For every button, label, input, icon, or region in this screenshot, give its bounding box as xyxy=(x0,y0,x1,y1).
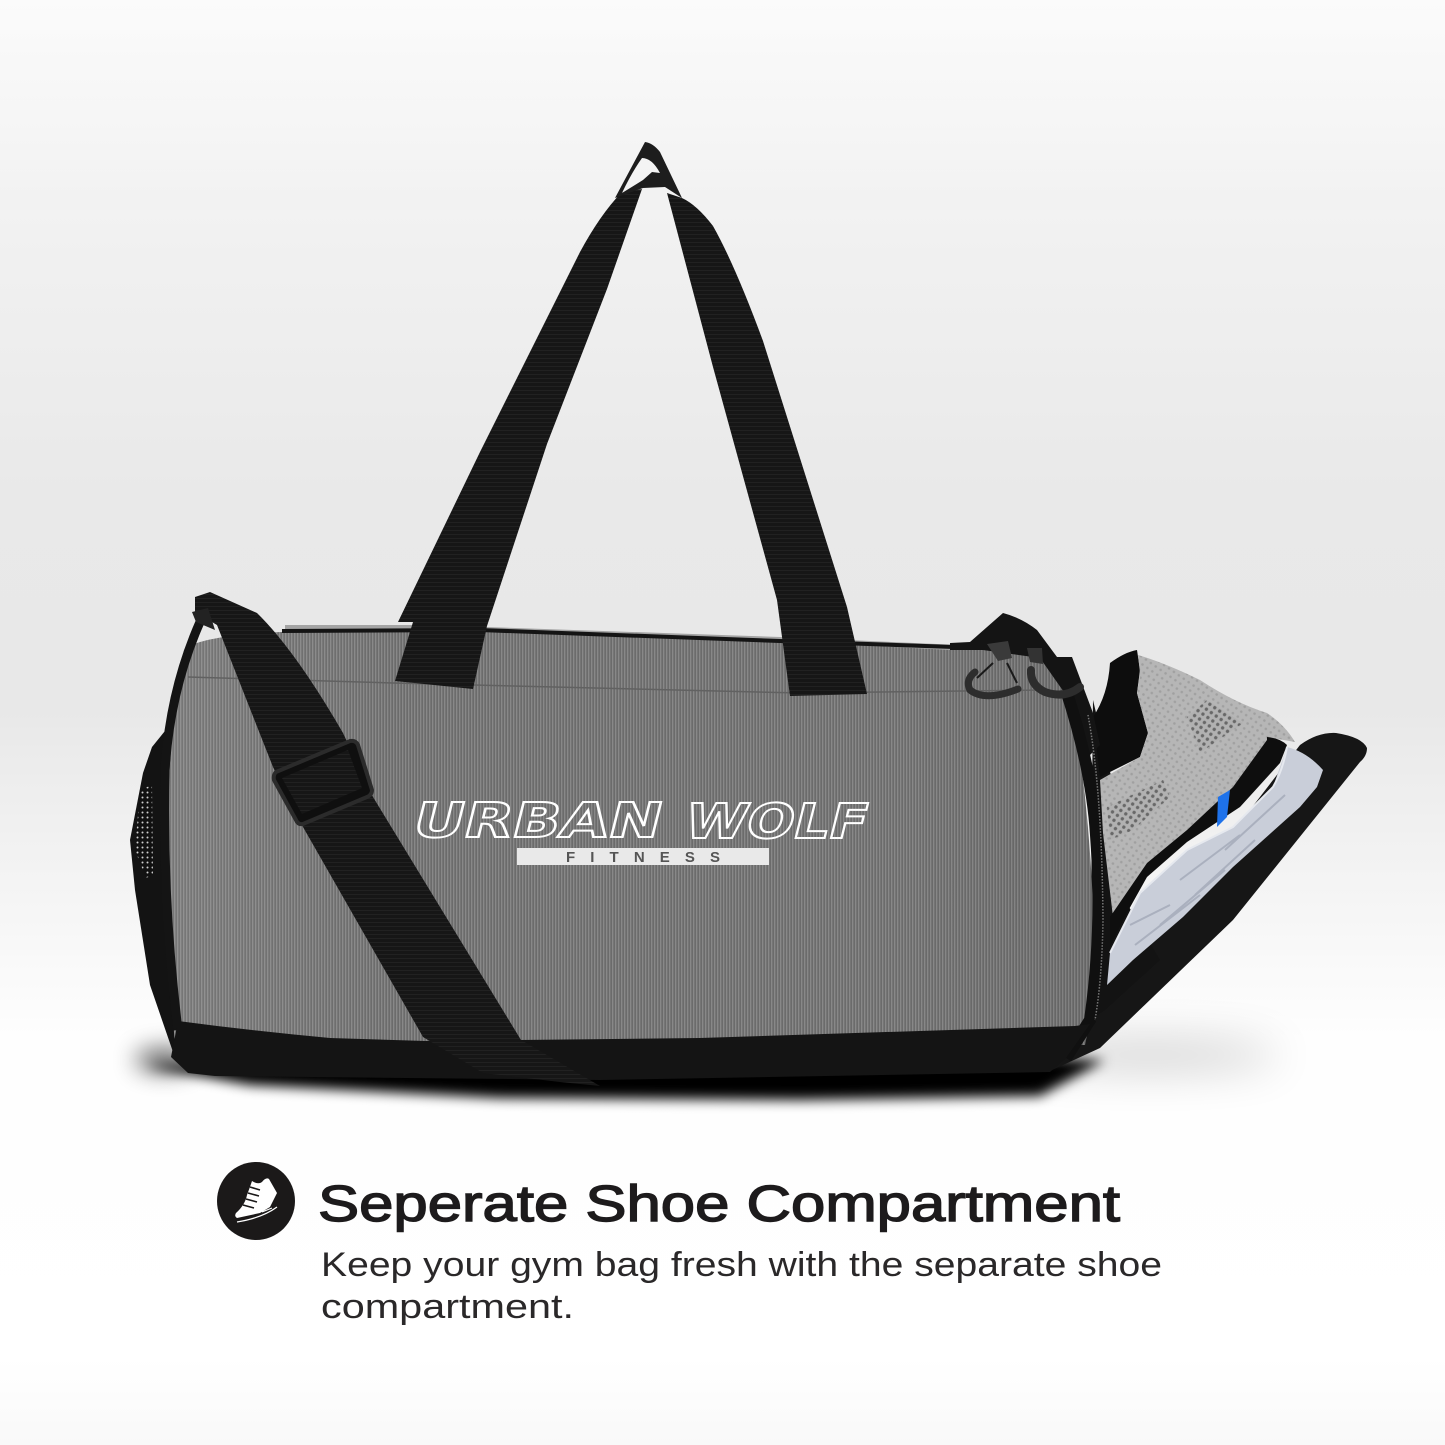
sole highlight edge xyxy=(1110,747,1287,953)
blue accent stripe xyxy=(1217,790,1230,827)
mesh perforations xyxy=(1187,700,1243,753)
zipper teeth xyxy=(1088,715,1103,1020)
logo sub text: FITNESS xyxy=(566,849,720,866)
logo wordmark outline xyxy=(407,794,875,850)
pocket mesh perforations xyxy=(135,785,153,878)
bottom black band xyxy=(171,1021,1090,1080)
right top handle xyxy=(667,193,867,696)
feature heading: Seperate Shoe Compartment xyxy=(318,1175,1120,1232)
shoulder strap xyxy=(195,592,600,1086)
brand logo xyxy=(407,794,875,866)
strap end tab xyxy=(192,608,215,630)
body light shading xyxy=(167,631,1094,1045)
dark compartment interior xyxy=(1090,700,1160,1020)
feature description: Keep your gym bag fresh with the separate shoe xyxy=(321,1246,1162,1284)
shoe inside compartment xyxy=(1093,650,1323,985)
sole tread lines xyxy=(1130,795,1285,945)
right zip piping xyxy=(1066,690,1098,1058)
feature description: compartment. xyxy=(321,1288,574,1326)
side mesh pocket xyxy=(130,700,190,1060)
mesh perforations lower xyxy=(1107,780,1170,840)
logo wordmark outline: URBAN xyxy=(407,794,669,849)
duffel bag illustration xyxy=(130,142,1367,1086)
midsole black stripe xyxy=(1110,737,1287,947)
shoe white sole xyxy=(1107,747,1323,985)
feature description xyxy=(321,1246,1162,1326)
main grey body xyxy=(167,631,1094,1045)
strap buckle xyxy=(274,741,372,824)
left top handle xyxy=(395,189,642,689)
left black piping xyxy=(165,622,200,1030)
logo sub bar xyxy=(517,848,769,865)
zipper pulls and rings xyxy=(968,641,1080,696)
feature icon: running shoe badge xyxy=(217,1162,295,1240)
top back hem of bag xyxy=(285,625,960,660)
logo wordmark outline: WOLF xyxy=(679,795,875,850)
shoe mesh upper xyxy=(1100,655,1295,917)
hem stitching xyxy=(188,677,1045,693)
handle top loop xyxy=(615,142,682,198)
shoe compartment flap xyxy=(1040,733,1367,1071)
top right black gusset xyxy=(950,613,1100,760)
shoe collar lining xyxy=(1093,650,1148,777)
top zipper line xyxy=(282,630,983,648)
ground shadow under bag xyxy=(135,1040,1280,1100)
